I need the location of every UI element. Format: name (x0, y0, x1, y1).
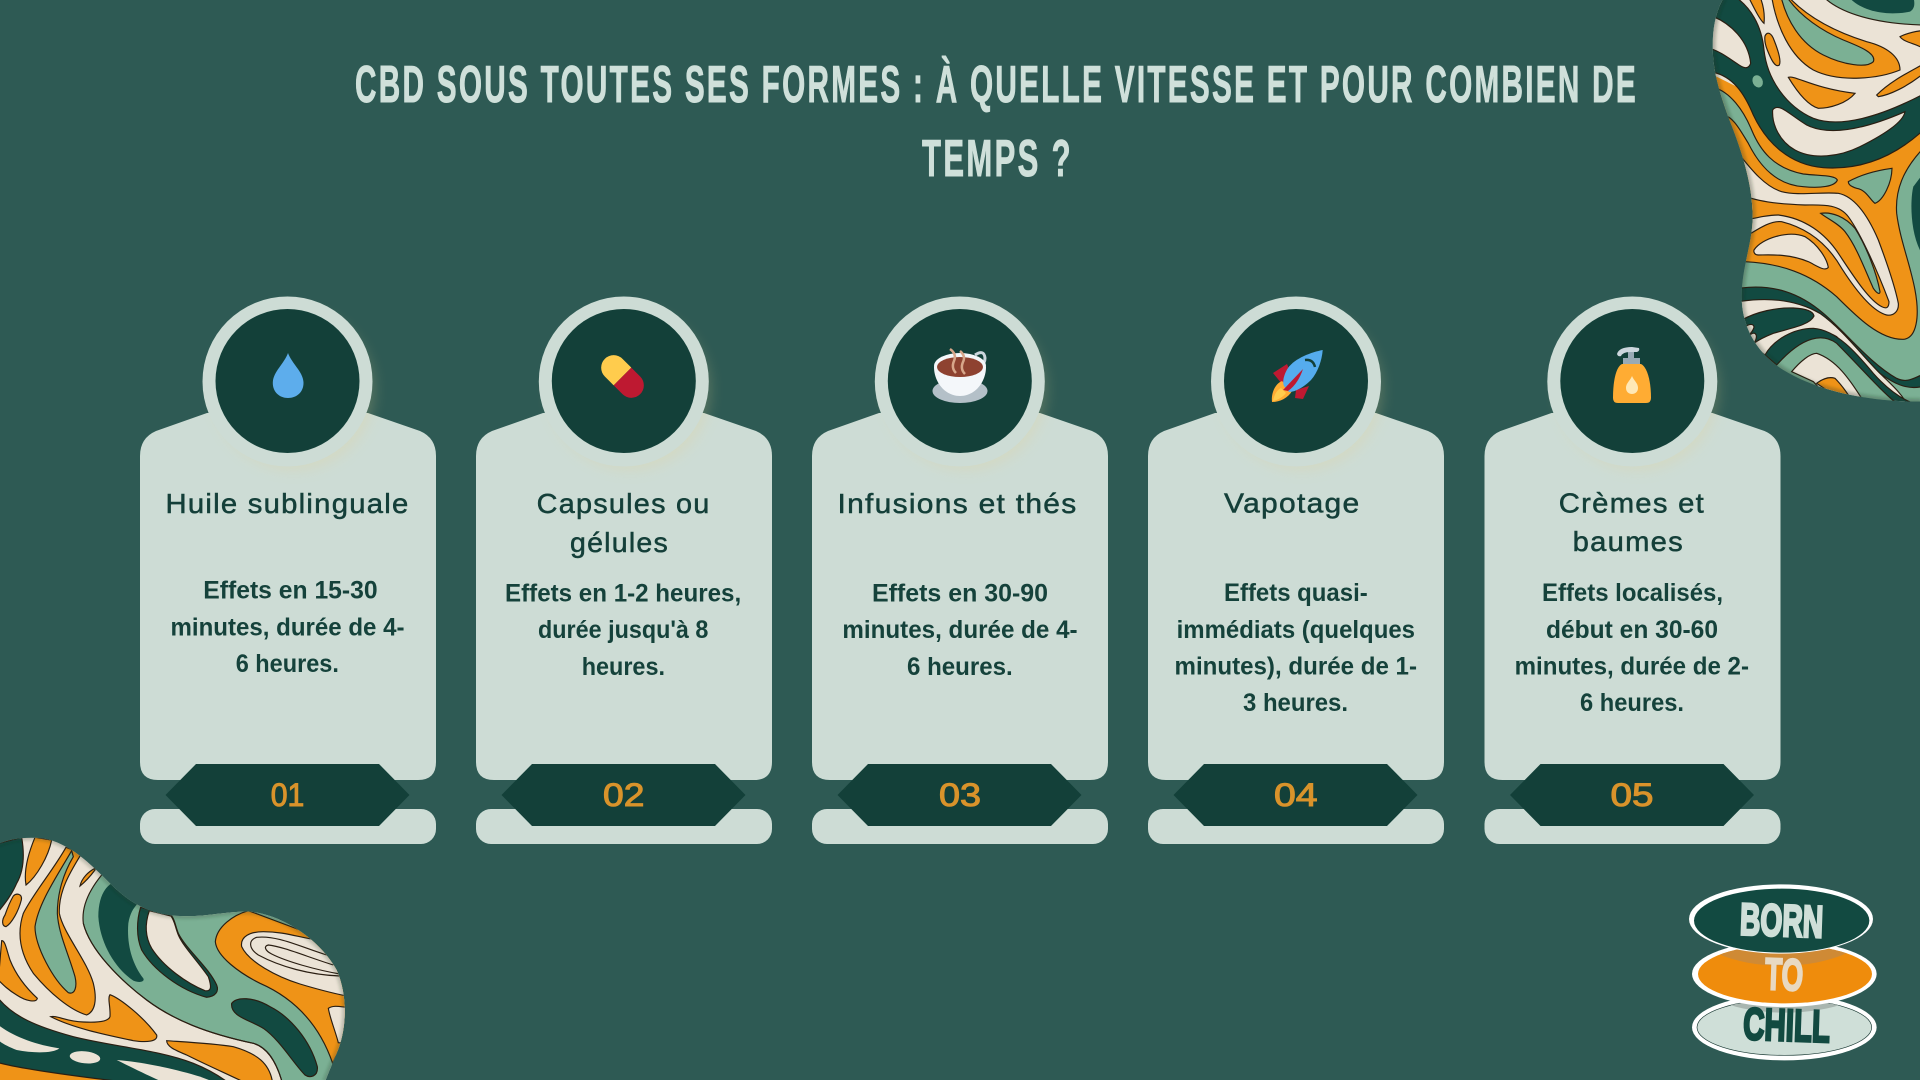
text block 2: durée jusqu'à 8 (538, 616, 708, 644)
title: TEMPS ? (922, 130, 1073, 188)
text block 4: 3 heures. (1243, 689, 1348, 717)
card body 5 (1484, 413, 1780, 780)
heading 4: Vapotage (1224, 488, 1360, 518)
text block 3: minutes, durée de 4- (842, 616, 1078, 644)
text block 4: immédiats (quelques (1177, 616, 1415, 644)
number badge 05 (1510, 764, 1754, 826)
panel: card 4 vapotage (1148, 296, 1444, 844)
base bar 1 (140, 809, 436, 844)
heading 1: Huile sublinguale (166, 488, 410, 519)
text block 4 (1174, 579, 1417, 717)
decorative blob: bottom left swirl (0, 833, 353, 1080)
text block 1: Effets en 15-30 (203, 576, 378, 604)
base bar 4 (1148, 809, 1444, 844)
text block 5: 6 heures. (1580, 689, 1684, 717)
card body 3 (812, 413, 1108, 780)
text block 1: minutes, durée de 4- (170, 614, 404, 642)
icon: tea cup (932, 349, 988, 403)
logo: born to chill: TO (1764, 948, 1804, 1001)
panel: card 3 infusions (812, 296, 1108, 844)
icon circle 1 (202, 296, 372, 466)
number badge 04: 04 (1274, 777, 1318, 813)
text block 4: Effets quasi- (1224, 579, 1368, 607)
heading 5: Crèmes et (1559, 488, 1705, 518)
card body 2 (476, 413, 772, 780)
heading 2: gélules (570, 527, 669, 558)
icon circle 5 (1547, 296, 1717, 466)
icon: pill (596, 350, 649, 403)
number badge 03: 03 (939, 777, 981, 813)
logo: born to chill: BORN (1739, 894, 1824, 947)
text block 2: heures. (582, 653, 665, 681)
text block 1: 6 heures. (236, 650, 339, 678)
heading 5: baumes (1573, 526, 1684, 557)
text block 2 (505, 580, 741, 681)
title (355, 56, 1638, 188)
number badge 01 (166, 764, 410, 826)
heading 5 (1559, 488, 1705, 557)
text block 3: 6 heures. (907, 653, 1013, 681)
heading 3: Infusions et thés (838, 488, 1078, 519)
text block 3 (842, 580, 1078, 681)
panel: card 1 huile sublinguale (140, 296, 436, 844)
text block 5: début en 30-60 (1546, 616, 1718, 644)
number badge 04 (1174, 764, 1418, 826)
text block 1 (170, 576, 404, 678)
text block 4: minutes), durée de 1- (1174, 652, 1417, 680)
text block 5 (1515, 579, 1749, 717)
icon: water drop (273, 353, 304, 398)
icon circle 2 (539, 296, 709, 466)
icon: pump bottle (1613, 347, 1651, 403)
number badge 03 (838, 764, 1082, 826)
icon circle 4 (1211, 296, 1381, 466)
card body 4 (1148, 413, 1444, 780)
text block 5: minutes, durée de 2- (1515, 652, 1749, 680)
base bar 5 (1484, 809, 1780, 844)
logo: born to chill (1689, 884, 1877, 1060)
heading 2 (537, 488, 710, 558)
panel: card 5 cremes (1484, 296, 1780, 844)
icon circle 3 (875, 296, 1045, 466)
panel: card 2 capsules (476, 296, 772, 844)
logo: born to chill: CHILL (1742, 998, 1831, 1052)
base bar 2 (476, 809, 772, 844)
number badge 01: 01 (271, 777, 304, 813)
base bar 3 (812, 809, 1108, 844)
icon: rocket (1272, 350, 1323, 402)
number badge 02 (502, 764, 746, 826)
text block 2: Effets en 1-2 heures, (505, 580, 741, 608)
number badge 05: 05 (1610, 777, 1654, 813)
text block 5: Effets localisés, (1542, 579, 1723, 607)
decorative blob: top right swirl (1712, 0, 1920, 402)
heading 2: Capsules ou (537, 488, 710, 519)
number badge 02: 02 (603, 777, 644, 813)
text block 3: Effets en 30-90 (872, 580, 1048, 608)
card body 1 (140, 413, 436, 780)
